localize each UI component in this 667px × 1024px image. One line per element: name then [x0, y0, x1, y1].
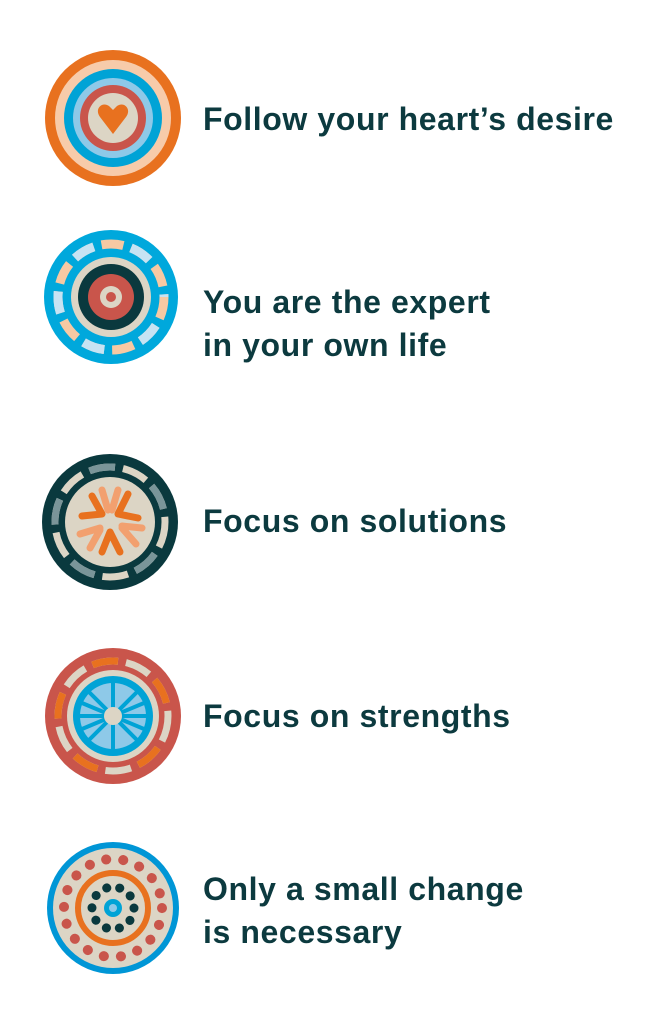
icon: dots: [47, 842, 179, 974]
icon: strengths: [45, 648, 181, 784]
text: expert: You are the expert: [203, 284, 491, 320]
text: heart: Follow your heart’s desire: [203, 101, 614, 137]
text: solutions: Focus on solutions: [203, 503, 507, 539]
text: small change: is necessary: [203, 914, 402, 950]
text: small change: Only a small change: [203, 871, 524, 907]
text: small change: [203, 871, 524, 950]
icon: heart: [45, 50, 181, 186]
icon: target: [44, 230, 178, 364]
text: expert: in your own life: [203, 327, 447, 363]
text: strengths: Focus on strengths: [203, 698, 511, 734]
icon: solutions: [42, 454, 178, 590]
text: expert: [203, 284, 491, 363]
